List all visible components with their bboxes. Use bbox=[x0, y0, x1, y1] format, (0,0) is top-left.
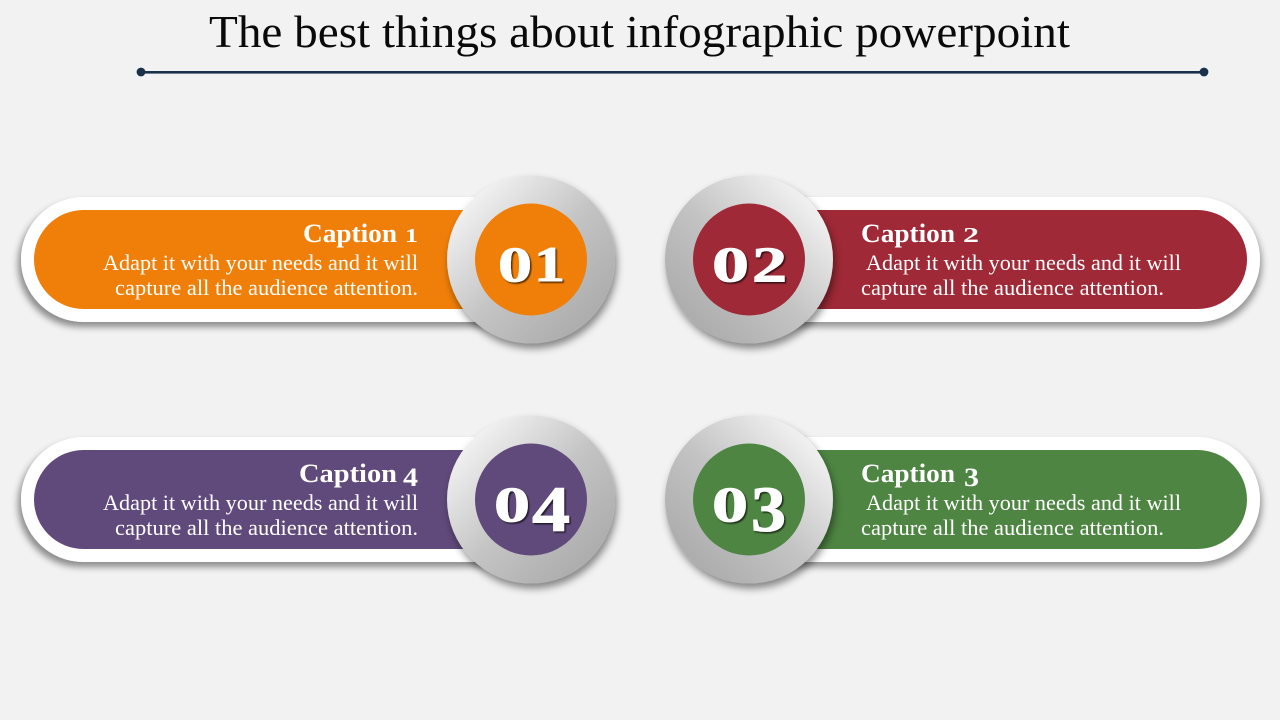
caption 4 heading: Caption bbox=[299, 459, 398, 488]
caption 4 text: Adapt it with your needs and it will bbox=[103, 490, 418, 515]
caption 2 text: capture all the audience attention. bbox=[861, 275, 1164, 300]
number 04: 4 bbox=[532, 474, 570, 546]
caption 3 heading: Caption bbox=[861, 459, 956, 488]
number 01: 1 bbox=[534, 236, 565, 292]
disc 01 bbox=[475, 204, 587, 316]
caption 4 heading: 4 bbox=[403, 463, 418, 492]
caption 3 text: Adapt it with your needs and it will bbox=[866, 490, 1181, 515]
number 03 bbox=[712, 474, 786, 546]
white pill outer bbox=[21, 197, 551, 322]
green pill inner bbox=[749, 450, 1247, 549]
ring 03 bbox=[665, 416, 833, 584]
ring 04 bbox=[447, 416, 615, 584]
white pill outer bbox=[729, 437, 1260, 562]
title divider with end dots bbox=[137, 68, 1208, 76]
caption 4 text: capture all the audience attention. bbox=[115, 515, 418, 540]
disc 04 bbox=[475, 444, 587, 556]
caption 1 text: Adapt it with your needs and it will bbox=[103, 250, 418, 275]
number 01 bbox=[498, 236, 565, 292]
white pill outer bbox=[21, 437, 551, 562]
caption 2 heading: 2 bbox=[963, 223, 979, 247]
caption 1 text: capture all the audience attention. bbox=[115, 275, 418, 300]
number 02 bbox=[712, 236, 787, 292]
caption 3 text: capture all the audience attention. bbox=[861, 515, 1164, 540]
orange pill inner bbox=[34, 210, 531, 309]
number 03: 3 bbox=[751, 474, 786, 546]
disc 03 bbox=[693, 444, 805, 556]
ring 01 bbox=[447, 176, 615, 344]
panel: caption 1 bbox=[21, 176, 615, 344]
caption 2 heading: Caption bbox=[861, 219, 956, 248]
title: The best things about infographic powerpoint bbox=[209, 6, 1070, 57]
white pill outer bbox=[729, 197, 1260, 322]
number 04: 0 bbox=[494, 476, 530, 532]
number 02: 2 bbox=[752, 236, 787, 292]
ring 02 bbox=[665, 176, 833, 344]
caption 1 heading: Caption bbox=[303, 219, 398, 248]
number 03: 0 bbox=[712, 476, 748, 532]
purple pill inner bbox=[34, 450, 531, 549]
panel: caption 3 bbox=[665, 416, 1260, 584]
caption 1 heading: 1 bbox=[405, 225, 418, 247]
disc 02 bbox=[693, 204, 805, 316]
caption 2 text: Adapt it with your needs and it will bbox=[866, 250, 1181, 275]
panel: caption 4 bbox=[21, 416, 615, 584]
number 01: 0 bbox=[498, 236, 532, 292]
red pill inner bbox=[749, 210, 1247, 309]
number 04 bbox=[494, 474, 570, 546]
panel: caption 2 bbox=[665, 176, 1260, 344]
number 02: 0 bbox=[712, 236, 749, 292]
caption 3 heading: 3 bbox=[964, 463, 979, 492]
